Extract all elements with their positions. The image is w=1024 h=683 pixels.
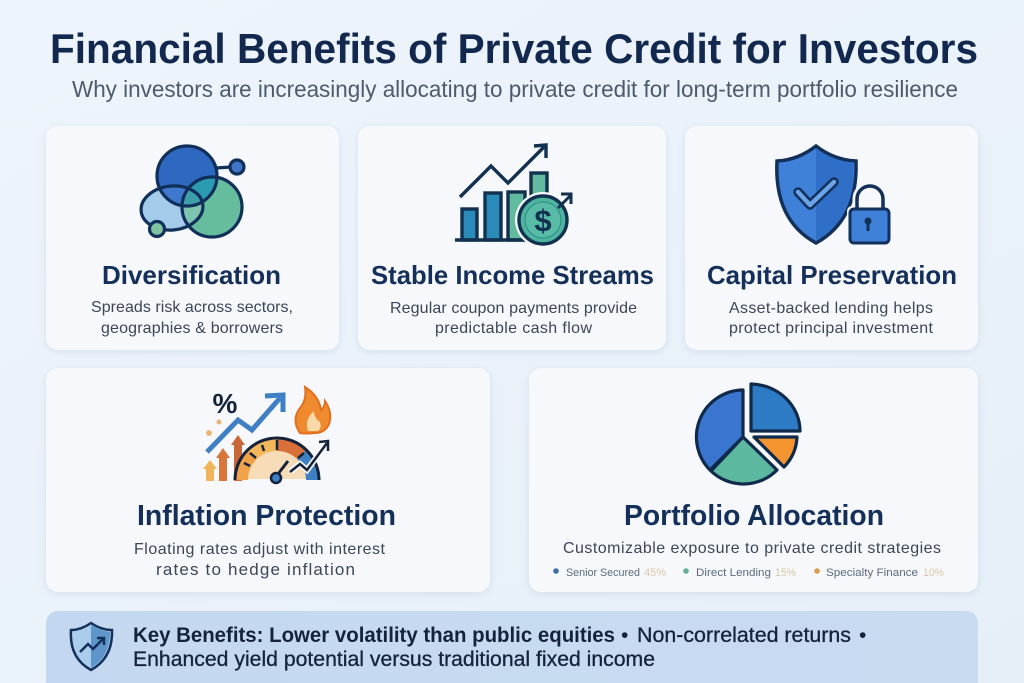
key benefits text: •: [621, 624, 628, 647]
legend: 10%: [923, 567, 944, 579]
description: Floating rates adjust with interest: [134, 541, 386, 558]
legend: 15%: [775, 567, 796, 579]
key benefits text: [133, 624, 866, 671]
heading: Portfolio Allocation: [624, 500, 884, 532]
key benefits text: Key Benefits: Lower volatility than public equities: [133, 624, 615, 647]
description: Asset-backed lending helps: [729, 300, 933, 317]
description: [91, 299, 293, 337]
subtitle: Why investors are increasingly allocating to private credit for long-term portfolio resilience: [72, 76, 958, 102]
description: geographies & borrowers: [101, 320, 283, 337]
key benefits text: •: [859, 624, 866, 647]
legend: 45%: [644, 567, 666, 579]
legend: [553, 567, 944, 579]
icon: inflation gauge: %: [213, 388, 238, 419]
key benefits text: Enhanced yield potential versus traditional fixed income: [133, 648, 655, 671]
icon: bar chart with coin: [455, 145, 571, 248]
icon: shield with trend arrow: [71, 623, 112, 670]
panel: stable income streams: [358, 126, 666, 350]
panel: portfolio allocation: [529, 368, 978, 592]
description: predictable cash flow: [435, 320, 592, 337]
legend: Direct Lending: [696, 567, 771, 579]
key benefits text: Non-correlated returns: [637, 624, 851, 647]
legend: Specialty Finance: [826, 567, 918, 579]
heading: Diversification: [102, 260, 281, 290]
icon: shield and lock: [777, 146, 892, 246]
description: protect principal investment: [729, 320, 934, 337]
panel: diversification: [46, 126, 339, 350]
panel: key benefits banner: [46, 611, 978, 683]
description: rates to hedge inflation: [156, 560, 355, 579]
panel: inflation protection: [46, 368, 490, 592]
legend: Senior Secured: [566, 567, 640, 579]
heading: Inflation Protection: [137, 500, 396, 532]
panel: capital preservation: [685, 126, 978, 350]
description: Customizable exposure to private credit strategies: [563, 540, 941, 557]
icon: inflation gauge: [203, 387, 330, 483]
description: Spreads risk across sectors,: [91, 299, 293, 316]
icon: pie chart: [696, 384, 800, 484]
heading: Capital Preservation: [707, 260, 957, 290]
description: Regular coupon payments provide: [390, 300, 637, 317]
icon: bar chart with coin: $: [534, 203, 552, 238]
description: [729, 300, 934, 337]
icon: overlapping circles: [139, 146, 244, 237]
description: [134, 541, 386, 579]
heading: Stable Income Streams: [371, 260, 654, 290]
title: Financial Benefits of Private Credit for Investors: [50, 25, 978, 72]
description: [390, 300, 637, 337]
